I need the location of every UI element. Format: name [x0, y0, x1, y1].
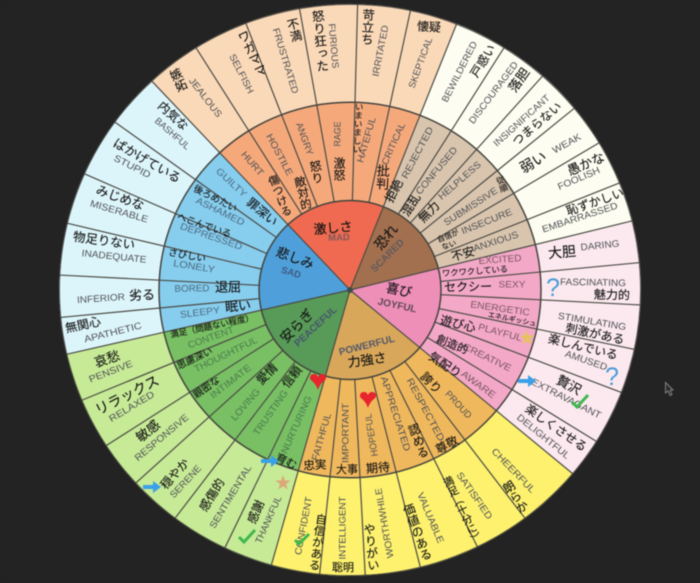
word: respected — [404, 377, 461, 457]
core: scared: 恐れ — [371, 221, 401, 253]
core: mad: MAD — [328, 232, 350, 244]
word: frustrated: FRUSTRATED — [270, 27, 300, 95]
word: weak — [517, 131, 584, 176]
word: faithful: 忠実 — [303, 458, 327, 473]
word: extravagant: EXTRAVAGANT — [529, 377, 603, 421]
word: aware: 気配り — [426, 348, 464, 381]
word: worthwhile — [361, 487, 397, 572]
word: thoughtful: THOUGHTFUL — [193, 335, 259, 375]
word: guilty — [213, 166, 280, 229]
word: insecure: ない — [440, 238, 458, 252]
word: content: 満足（問題ない程度） — [169, 312, 255, 340]
word: selfish: SELFISH — [226, 52, 256, 96]
word: intelligent: 聡明 — [332, 560, 354, 574]
word: daring: DARING — [580, 238, 620, 254]
word: rage: 激怒 — [332, 156, 346, 181]
word: daring — [547, 238, 620, 261]
word: discouraged: 落胆 — [505, 65, 533, 95]
word: ashamed — [191, 182, 246, 229]
word: critical: CRITICAL — [380, 121, 408, 167]
word: apathetic — [64, 313, 143, 345]
word: ashamed: 後ろめたい — [191, 182, 239, 215]
word: inferior: INFERIOR — [77, 292, 125, 306]
middle ring — [159, 102, 541, 478]
word: confident: 自信がある — [307, 513, 328, 571]
core: sad: SAD — [280, 265, 302, 281]
word: bored: BORED — [174, 283, 210, 295]
word: stupid: ばかげている — [111, 136, 183, 186]
word: depressed — [175, 212, 244, 253]
word: depressed: DEPRESSED — [178, 221, 244, 253]
word: insecure: INSECURE — [460, 207, 514, 237]
icon: stars — [275, 330, 535, 490]
word: insignificant: つまらない — [510, 99, 564, 149]
word: stimulating — [557, 311, 627, 347]
word: hopeful — [363, 413, 391, 476]
panel: Mad middle words — [238, 102, 408, 219]
word: helpless: HELPLESS — [436, 159, 484, 203]
word: furious: 怒り狂った — [309, 9, 329, 73]
word: hurt: 傷つける — [265, 172, 293, 219]
word: miserable — [89, 183, 149, 226]
word: bashful: 内気な — [155, 98, 192, 133]
word: sleepy: 眠い — [224, 297, 252, 315]
core: joyful — [377, 280, 417, 315]
word: embarrassed — [541, 186, 626, 235]
word: proud — [418, 370, 474, 421]
word: angry: ANGRY — [293, 121, 315, 157]
icon: mouse cursor — [666, 382, 673, 396]
word: amused: 楽しんでいる — [547, 332, 619, 362]
word: hurt: HURT — [238, 149, 266, 179]
word: energetic: エネルギッシュ — [487, 311, 537, 328]
word: irritated: 苛立ち — [359, 8, 375, 46]
word: aware: AWARE — [459, 369, 497, 401]
word: insecure: 自信が — [436, 226, 461, 244]
word: furious: FURIOUS — [326, 23, 340, 69]
word: excited: EXCITED — [478, 253, 522, 267]
word: embarrassed: EMBARRASSED — [541, 201, 619, 235]
word: jealous: JEALOUS — [186, 76, 224, 120]
word: hostile — [263, 132, 313, 211]
word: lonely: LONELY — [172, 258, 216, 276]
word: playful: PLAYFUL — [477, 322, 523, 344]
word: faithful: FAITHFUL — [310, 412, 334, 462]
word: serene: 穏やか — [158, 456, 192, 492]
word: angry: 怒り — [307, 159, 325, 185]
word: anxious: ANXIOUS — [472, 230, 520, 254]
word: cheerful — [489, 446, 537, 516]
word: discouraged: DISCOURAGED — [467, 60, 521, 126]
word: pensive: 哀愁 — [92, 348, 122, 370]
word: bashful: BASHFUL — [152, 116, 192, 152]
word: cheerful: CHEERFUL — [489, 446, 537, 496]
panel: Powerful outer words — [293, 446, 537, 574]
word: respected: RESPECTED — [404, 377, 446, 444]
word: serene — [158, 456, 204, 501]
panel: Peaceful outer words — [88, 348, 284, 546]
inner ring — [259, 200, 441, 379]
panel: Joyful outer words — [514, 238, 630, 462]
word: confident: CONFIDENT — [293, 496, 315, 556]
word: helpless — [415, 159, 484, 225]
word: rejected: REJECTED — [400, 125, 436, 181]
word: stupid: STUPID — [112, 153, 152, 181]
panel: core emotions — [274, 219, 417, 370]
word: skeptical: 懐疑 — [417, 18, 441, 35]
panel: Sad outer words — [64, 98, 192, 345]
word: pensive: PENSIVE — [88, 359, 134, 385]
word: important — [336, 403, 358, 476]
core: scared: SCARED — [369, 237, 407, 275]
word: confused — [398, 145, 460, 219]
word: daring: 大胆 — [547, 243, 577, 261]
word: anxious: 不安 — [450, 244, 476, 264]
word: creative: 創造的 — [434, 331, 470, 357]
word: foolish: 愚かな — [565, 149, 607, 179]
word: appreciated: 認める — [405, 421, 431, 460]
word: responsive: 敏感 — [133, 417, 163, 445]
word: important: IMPORTANT — [340, 403, 352, 463]
word: frustrated — [270, 17, 304, 95]
word: apathetic: APATHETIC — [83, 320, 143, 345]
word: depressed: へこんでいる — [175, 212, 233, 240]
word: playful — [439, 313, 523, 344]
icon: hearts — [310, 374, 376, 408]
word: rejected — [382, 125, 436, 205]
word: appreciated — [378, 375, 431, 460]
word: submissive: SUBMISSIVE — [442, 186, 500, 228]
word: hateful: いまいましい — [352, 102, 364, 154]
word: inadequate: 物足りない — [72, 230, 136, 252]
word: rage — [332, 122, 346, 181]
panel: Sad middle words — [167, 166, 280, 321]
word: serene: SERENE — [168, 463, 204, 501]
word: intimate: 親密な — [190, 373, 222, 401]
word: frustrated: 不満 — [284, 17, 304, 44]
word: intelligent — [332, 496, 354, 574]
word: weak: WEAK — [551, 131, 584, 156]
word: creative: CREATIVE — [461, 342, 513, 374]
word: foolish: FOOLISH — [556, 165, 602, 193]
word: valuable: VALUABLE — [414, 491, 446, 545]
word: inferior — [77, 287, 155, 306]
word: lonely: さびしい — [167, 247, 207, 265]
word: trusting — [251, 363, 305, 438]
word: bored — [174, 280, 241, 295]
word: faithful — [303, 412, 334, 473]
word: sexy — [444, 280, 526, 294]
panel: Scared middle words — [382, 125, 520, 264]
word: critical: 批判 — [374, 164, 390, 191]
word: sentimental: SENTIMENTAL — [208, 463, 254, 531]
word: jealous: 嫉妬 — [166, 65, 189, 94]
core: mad: 激しさ — [313, 219, 353, 237]
word: ashamed: ASHAMED — [194, 195, 246, 229]
word: guilty: 罪深い — [244, 195, 280, 229]
word: pensive — [88, 348, 134, 385]
word: sentimental: 感傷的 — [196, 475, 227, 514]
core: joyful: JOYFUL — [377, 297, 417, 315]
word: bewildered: BEWILDERED — [440, 40, 480, 104]
word: sleepy — [179, 297, 252, 321]
word: sexy: セクシー — [444, 280, 492, 294]
word: bashful — [152, 98, 192, 152]
word: embarrassed: 恥ずかしい — [564, 186, 626, 218]
word: inferior: 劣る — [129, 287, 155, 303]
icon: question marks: ? — [546, 274, 560, 302]
word: inadequate: INADEQUATE — [81, 248, 147, 266]
word: relaxed: RELAXED — [107, 389, 157, 425]
word: energetic: ENERGETIC — [470, 299, 531, 319]
panel: Joyful middle words — [426, 253, 537, 401]
word: hateful: HATEFUL — [355, 116, 379, 164]
word: amused: AMUSED — [563, 349, 609, 373]
word: irritated — [359, 8, 391, 78]
word: delightful: DELIGHTFUL — [514, 412, 572, 462]
word: important: 大事 — [336, 462, 358, 476]
word: proud: 誇り — [418, 370, 444, 396]
word: confused: CONFUSED — [414, 145, 460, 197]
word: jealous — [166, 65, 224, 120]
core: joyful: 喜び — [385, 280, 413, 300]
core: powerful: 力強さ — [347, 350, 387, 370]
word: skeptical: SKEPTICAL — [407, 36, 435, 90]
word: apathetic: 無関心 — [64, 313, 102, 336]
word: fascinating — [560, 277, 630, 302]
word: satisfied: 満足（十分に） — [440, 474, 484, 546]
word: thankful: THANKFUL — [254, 494, 284, 546]
word: relaxed: リラックス — [92, 372, 162, 418]
core: sad: 悲しみ — [274, 244, 316, 272]
word: hurt — [238, 149, 293, 219]
word: valuable: 価値のある — [400, 501, 434, 563]
icon: blue arrows — [143, 375, 536, 493]
word: loving: LOVING — [229, 387, 263, 423]
word: nurturing: NURTURING — [279, 394, 315, 456]
word: stimulating: 刺激がある — [564, 320, 626, 347]
word: weak: 弱い — [517, 148, 549, 176]
word: excited — [442, 253, 522, 278]
word: sentimental — [196, 463, 254, 531]
word: hopeful: HOPEFUL — [363, 413, 381, 457]
word: furious — [309, 9, 340, 73]
word: creative — [434, 331, 513, 374]
word: nurturing: 育む — [273, 451, 299, 472]
word: bored: 退屈 — [215, 280, 241, 294]
panel: Peaceful middle words — [169, 312, 315, 472]
word: energetic — [470, 299, 537, 328]
word: loving — [229, 361, 280, 423]
word: appreciated: APPRECIATED — [378, 375, 412, 453]
word: hostile: HOSTILE — [263, 132, 295, 178]
word: proud: PROUD — [442, 389, 474, 421]
word: trusting: 信頼 — [279, 363, 305, 391]
word: inadequate — [72, 230, 147, 266]
word: worthwhile: WORTHWHILE — [373, 487, 397, 559]
word: miserable: みじめな — [94, 183, 146, 213]
core: powerful: POWERFUL — [338, 334, 396, 358]
word: fascinating: FASCINATING — [560, 277, 626, 289]
word: thoughtful: 思慮深い — [175, 345, 215, 372]
word: satisfied: SATISFIED — [454, 470, 494, 522]
panel: Mad outer words — [166, 8, 441, 120]
word: foolish — [556, 149, 607, 193]
word: skeptical — [407, 18, 441, 90]
word: helpless: 無力 — [415, 198, 442, 225]
icon: green check marks — [239, 395, 588, 544]
word: stimulating: STIMULATING — [557, 311, 627, 333]
word: submissive: 従順 — [494, 174, 510, 195]
word: bewildered — [440, 40, 498, 104]
word: guilty: GUILTY — [213, 166, 249, 200]
word: selfish: ワガママ — [234, 28, 268, 80]
word: responsive: RESPONSIVE — [133, 412, 191, 464]
word: trusting: TRUSTING — [251, 388, 291, 438]
icon: question marks: ? — [605, 363, 619, 391]
word: lonely — [167, 247, 216, 276]
word: worthwhile: やりがい — [361, 522, 380, 572]
word: bewildered: 戸惑い — [468, 42, 498, 80]
icon: question marks — [546, 274, 619, 391]
word: playful: 遊び心 — [439, 313, 477, 335]
word: delightful: 楽しくさせる — [522, 402, 590, 454]
word: hostile: 敵対的 — [292, 175, 313, 211]
word: respected: 尊敬 — [433, 432, 461, 457]
word: aware — [426, 348, 497, 401]
word: confident — [293, 496, 328, 571]
word: thankful: 感謝 — [244, 498, 267, 526]
word: sleepy: SLEEPY — [179, 305, 221, 321]
core: peaceful: 安らぎ — [277, 306, 317, 346]
panel: Powerful middle words — [303, 370, 474, 476]
word: hateful — [352, 102, 379, 164]
word: rage: RAGE — [332, 122, 344, 146]
word: extravagant: 贅沢 — [554, 372, 584, 398]
word: insecure — [436, 207, 514, 252]
word: confused: 混乱 — [398, 191, 423, 219]
word: sexy: SEXY — [498, 280, 526, 290]
word: rejected: 拒絶 — [382, 177, 406, 205]
word: irritated: IRRITATED — [371, 24, 391, 78]
core: powerful — [338, 334, 396, 370]
word: content: CONTENT — [187, 325, 236, 351]
word: selfish — [226, 28, 268, 96]
word: intelligent: INTELLIGENT — [338, 496, 348, 560]
word: submissive — [442, 174, 510, 228]
word: intimate — [190, 363, 254, 401]
word: valuable — [400, 491, 446, 563]
word: excited: ワクワクしている — [442, 264, 508, 278]
word: insignificant: INSIGNIFICANT — [492, 93, 553, 149]
word: intimate: INTIMATE — [208, 363, 254, 401]
word: anxious — [450, 230, 520, 264]
word: angry — [293, 121, 325, 185]
word: miserable: MISERABLE — [89, 198, 149, 226]
core: peaceful: PEACEFUL — [293, 305, 339, 349]
word: fascinating: 魅力的 — [594, 287, 630, 302]
word: nurturing — [273, 394, 315, 472]
word: hopeful: 期待 — [365, 460, 391, 476]
panel: Scared outer words — [440, 40, 626, 235]
word: cheerful: 朗らか — [499, 478, 531, 516]
word: critical — [374, 121, 408, 191]
word: loving: 愛情 — [254, 361, 280, 387]
